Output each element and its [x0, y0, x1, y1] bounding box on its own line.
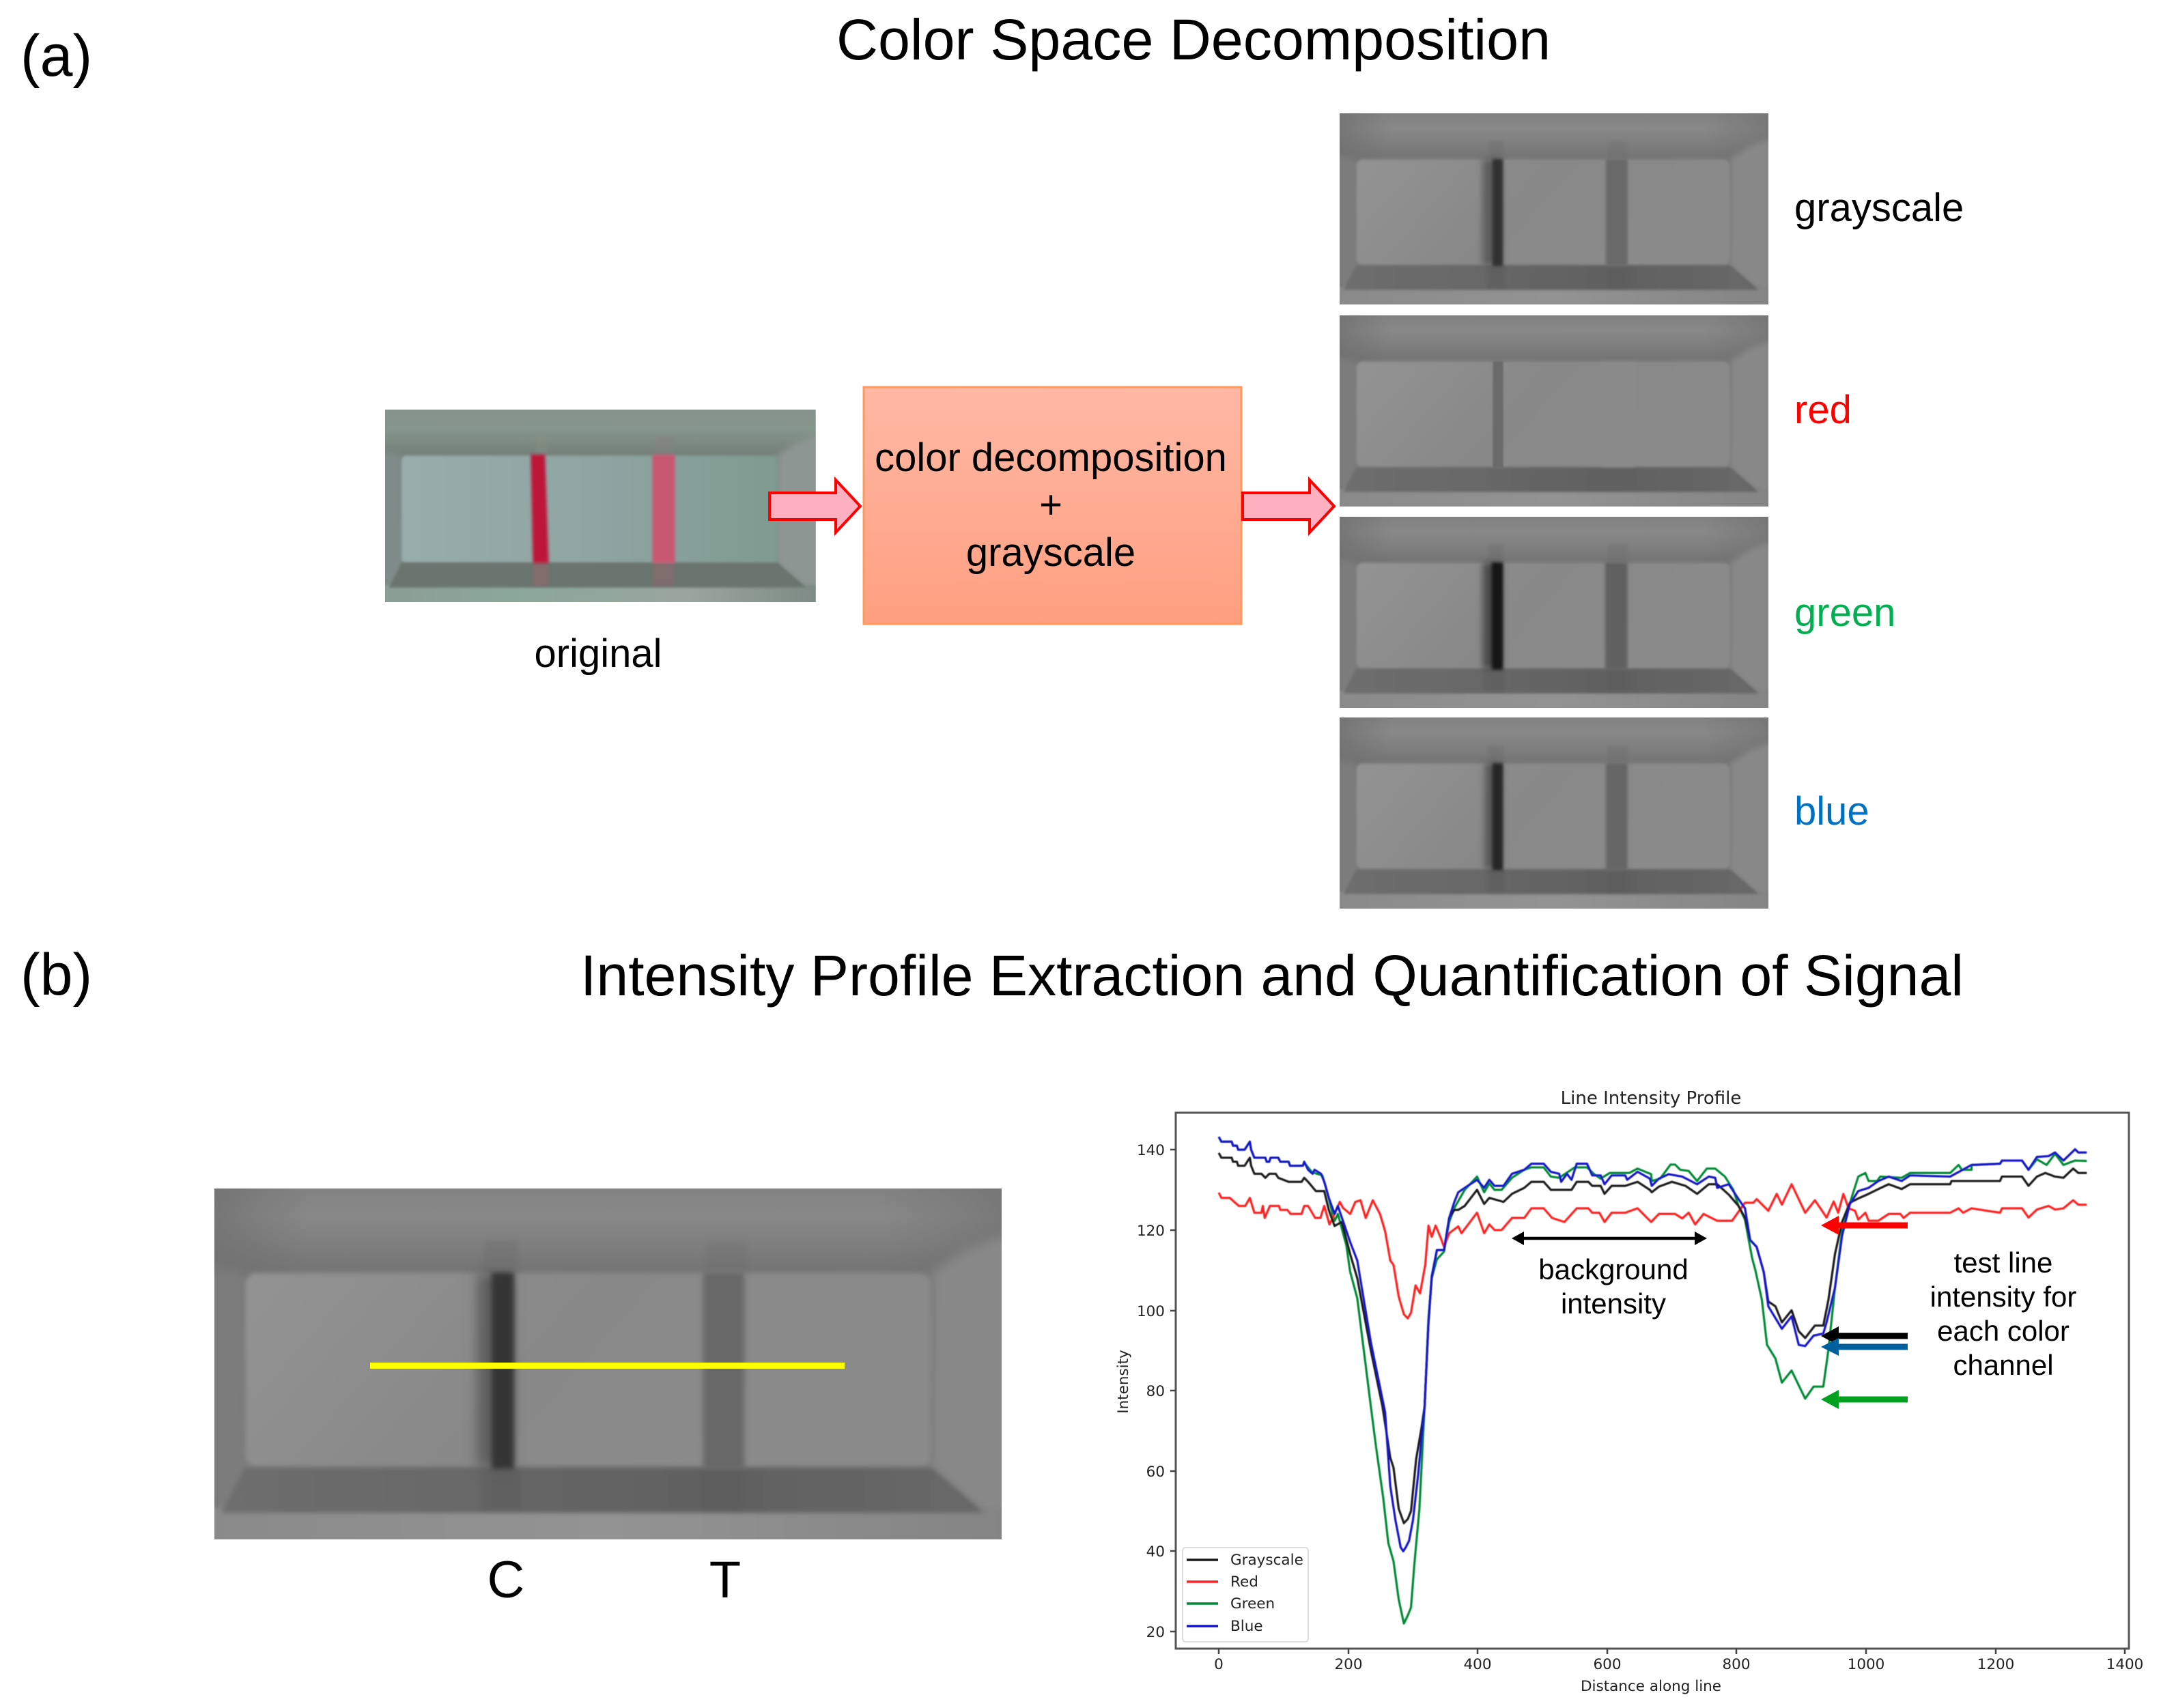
panel label: (b): (b) — [20, 942, 92, 1008]
annotation: background intensity text: background — [1538, 1253, 1689, 1285]
chart title: Line Intensity Profile — [1561, 1088, 1741, 1109]
arrow: grayscale test line — [1821, 1326, 1908, 1346]
x axis label: Distance along line — [1581, 1678, 1721, 1695]
green curve — [1219, 1137, 2087, 1623]
arrow: to colour channels — [1243, 480, 1334, 532]
process box: color decomposition + grayscale — [864, 387, 1241, 624]
label: T: T — [709, 1551, 741, 1609]
label: original: original — [534, 631, 662, 676]
channel image: grayscale — [1332, 113, 1779, 310]
legend: Grayscale — [1230, 1552, 1303, 1569]
yellow sampling line — [370, 1363, 845, 1369]
x axis ticks and labels — [1214, 1649, 2143, 1673]
x axis ticks and labels: 200 — [1334, 1656, 1363, 1673]
title: Color Space Decomposition: Color Space Decomposition — [836, 8, 1551, 72]
y axis ticks and labels: 20 — [1146, 1624, 1165, 1641]
arrow: red channel test line — [1821, 1216, 1908, 1235]
y axis label: Intensity — [1115, 1350, 1132, 1414]
x axis ticks and labels: 0 — [1214, 1656, 1224, 1673]
x axis ticks and labels: 1400 — [2106, 1656, 2143, 1673]
annotation: test line intensity text: channel — [1953, 1349, 2054, 1381]
channel image: red — [1332, 315, 1779, 512]
annotation: test line intensity text: test line — [1954, 1247, 2052, 1279]
profile curves — [1219, 1137, 2087, 1623]
title: Intensity Profile Extraction and Quantification of Signal: Intensity Profile Extraction and Quantification of Signal — [580, 943, 1964, 1008]
channel image: green — [1332, 517, 1779, 713]
arrow: green channel test line — [1821, 1390, 1908, 1409]
x axis ticks and labels: 800 — [1722, 1656, 1751, 1673]
label: C: C — [488, 1551, 524, 1609]
y axis ticks and labels: 120 — [1137, 1223, 1165, 1240]
y axis ticks and labels: 100 — [1137, 1303, 1165, 1320]
arrow: blue channel test line — [1821, 1338, 1908, 1356]
y axis ticks and labels — [1137, 1142, 1176, 1641]
process box: color decomposition + grayscale: + — [1039, 483, 1062, 527]
label: green: green — [1794, 590, 1895, 635]
annotation: test line intensity text: intensity for — [1930, 1281, 2076, 1313]
axes frame — [1176, 1113, 2129, 1649]
y axis ticks and labels: 80 — [1146, 1383, 1165, 1400]
red curve — [1219, 1184, 2087, 1318]
arrow: into decomposition — [769, 480, 860, 532]
y axis ticks and labels: 60 — [1146, 1464, 1165, 1481]
blue curve — [1219, 1137, 2087, 1551]
label: blue: blue — [1794, 789, 1869, 834]
annotation: test line intensity text: each color — [1937, 1315, 2070, 1347]
label: grayscale: grayscale — [1794, 186, 1964, 230]
process box: color decomposition + grayscale: grayscale — [966, 530, 1135, 575]
x axis ticks and labels: 1000 — [1848, 1656, 1884, 1673]
y axis ticks and labels: 140 — [1137, 1142, 1165, 1159]
process box: color decomposition + grayscale: color decomposition — [875, 436, 1227, 480]
chart: line intensity profile — [1115, 1088, 2143, 1695]
test strip: original colour image — [378, 410, 825, 608]
channel image: blue — [1332, 717, 1779, 914]
legend: Red — [1230, 1574, 1258, 1591]
strip with sampling line — [201, 1189, 1020, 1549]
annotation: background intensity text — [1538, 1253, 1689, 1320]
legend — [1183, 1548, 1308, 1642]
label: red: red — [1794, 388, 1852, 432]
black grayscale curve — [1219, 1153, 2087, 1523]
x axis ticks and labels: 600 — [1593, 1656, 1622, 1673]
legend: Green — [1230, 1595, 1275, 1612]
annotation: background intensity double arrow — [1512, 1232, 1707, 1245]
annotation: test line intensity text — [1930, 1247, 2076, 1381]
x axis ticks and labels: 1200 — [1977, 1656, 2014, 1673]
annotation: background intensity text: intensity — [1561, 1287, 1666, 1320]
y axis ticks and labels: 40 — [1146, 1543, 1165, 1561]
legend: Blue — [1230, 1618, 1263, 1635]
x axis ticks and labels: 400 — [1463, 1656, 1492, 1673]
panel label: (a): (a) — [20, 23, 92, 89]
